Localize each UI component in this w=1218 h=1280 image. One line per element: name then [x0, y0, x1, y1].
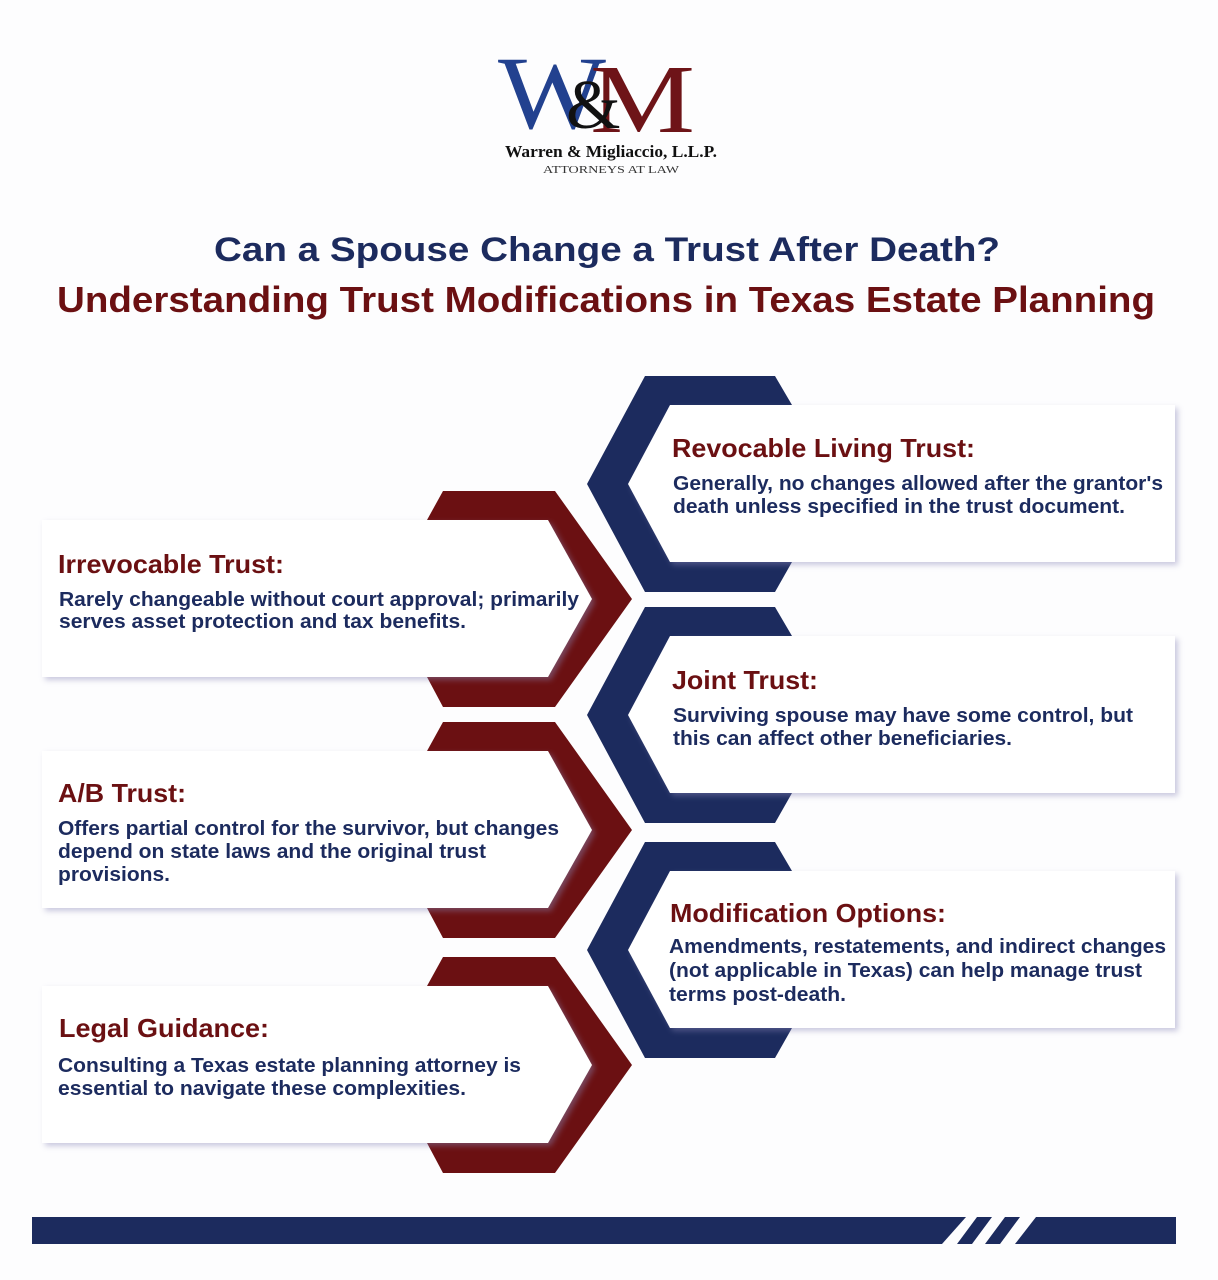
- footer bar: [32, 1217, 1176, 1244]
- panel: modification options: Modification Options:: [670, 898, 946, 928]
- panel: legal guidance: [42, 957, 632, 1173]
- panel: revocable living trust: death unless specified in the trust document.: [673, 496, 1125, 518]
- panel: irrevocable trust: Rarely changeable without court approval; primarily: [59, 589, 580, 611]
- panel: revocable living trust: Revocable Living Trust:: [672, 433, 975, 463]
- panel: revocable living trust: [587, 376, 1175, 592]
- logo: [498, 36, 717, 176]
- panel: joint trust: Joint Trust:: [672, 665, 818, 695]
- panel: joint trust: this can affect other beneficiaries.: [673, 728, 1012, 750]
- logo: M: [590, 46, 695, 154]
- logo: &: [566, 67, 620, 144]
- panel: irrevocable trust: serves asset protection and tax benefits.: [59, 611, 466, 633]
- panel: joint trust: Surviving spouse may have some control, but: [673, 705, 1133, 727]
- panel: legal guidance: essential to navigate these complexities.: [58, 1078, 466, 1100]
- panel: legal guidance: Consulting a Texas estate planning attorney is: [58, 1055, 521, 1077]
- panel: a/b trust: [42, 722, 632, 938]
- panel: a/b trust: provisions.: [58, 864, 170, 886]
- panel: legal guidance: Legal Guidance:: [59, 1013, 269, 1043]
- title: Can a Spouse Change a Trust After Death?: [214, 231, 1000, 269]
- panel: revocable living trust: Generally, no changes allowed after the grantor's: [673, 473, 1163, 495]
- panel: modification options: terms post-death.: [669, 984, 846, 1006]
- panel: modification options: Amendments, restatements, and indirect changes: [669, 936, 1166, 958]
- title: Understanding Trust Modifications in Texas Estate Planning: [57, 279, 1155, 320]
- panel: modification options: [587, 842, 1175, 1058]
- logo: W: [498, 36, 606, 151]
- panel: irrevocable trust: Irrevocable Trust:: [58, 549, 284, 579]
- title: [57, 231, 1155, 320]
- panel: a/b trust: depend on state laws and the original trust: [58, 841, 486, 863]
- panel: a/b trust: A/B Trust:: [58, 778, 186, 808]
- panel: joint trust: [587, 607, 1175, 823]
- logo: ATTORNEYS AT LAW: [543, 165, 680, 176]
- logo: Warren & Migliaccio, L.L.P.: [505, 142, 717, 161]
- panel: modification options: (not applicable in Texas) can help manage trust: [669, 960, 1142, 982]
- panel: a/b trust: Offers partial control for the survivor, but changes: [58, 818, 559, 840]
- panel: irrevocable trust: [42, 491, 632, 707]
